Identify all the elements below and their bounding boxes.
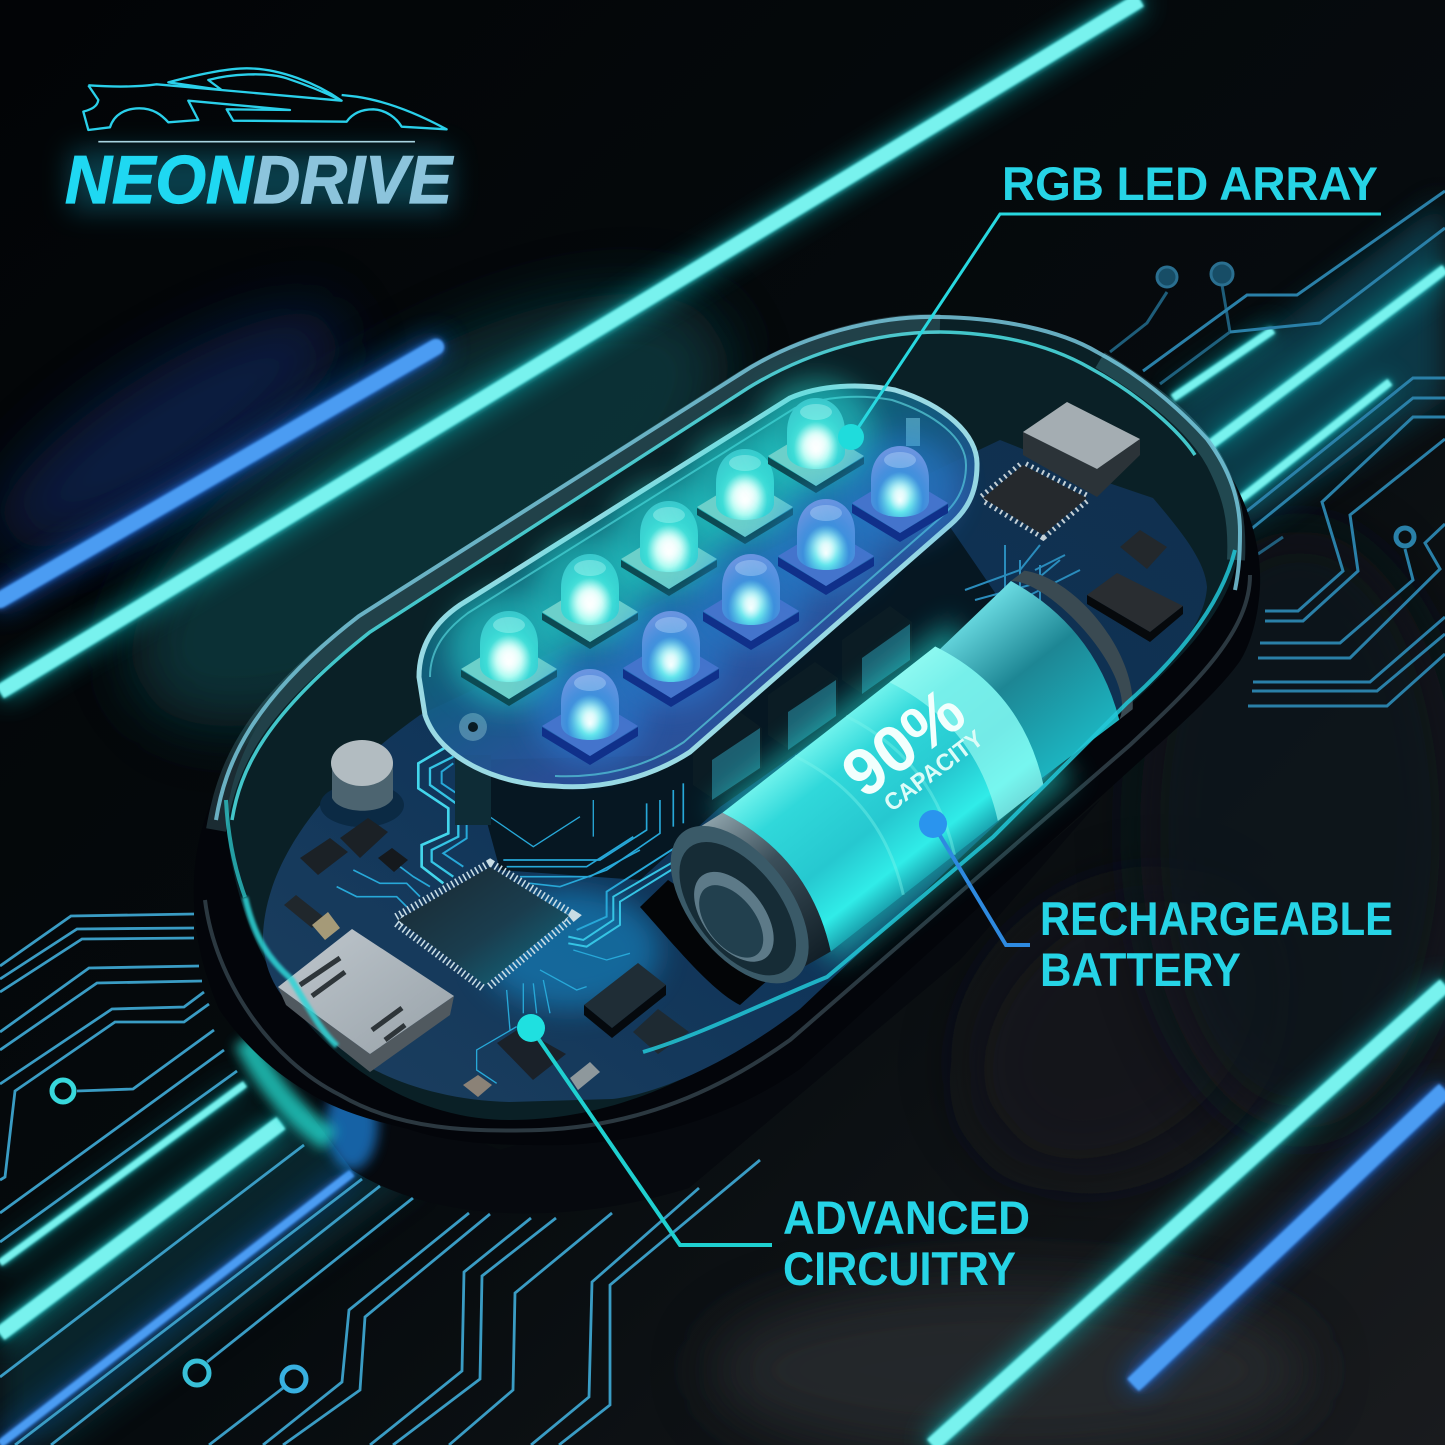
LED row: blue xyxy=(532,434,958,765)
label: ADVANCED xyxy=(783,1191,1030,1244)
LED plate xyxy=(419,379,977,787)
dot xyxy=(838,424,864,450)
circuit traces: bottom left xyxy=(0,914,760,1445)
circuit traces: right xyxy=(1110,191,1445,706)
USB connector xyxy=(278,929,454,1072)
dot xyxy=(517,1014,545,1042)
icon: car outline xyxy=(83,68,447,142)
LED row: cyan xyxy=(449,379,876,708)
board traces: centre xyxy=(337,747,683,1083)
small components xyxy=(284,818,689,1097)
circuit board xyxy=(263,402,1207,1102)
pillars below LED plate xyxy=(455,606,912,825)
mounting holes xyxy=(459,418,920,741)
label: BATTERY xyxy=(1040,943,1241,996)
battery xyxy=(642,549,1166,1019)
microcontroller chip xyxy=(398,867,569,985)
logo glow xyxy=(70,150,450,210)
logo wordmark: NEONDRIVE xyxy=(65,142,455,218)
callout: rechargeable battery xyxy=(919,810,1393,996)
dome interior xyxy=(226,317,1240,1120)
logo: NeonDrive xyxy=(65,68,455,218)
callout: RGB LED array xyxy=(838,157,1381,450)
board traces: right xyxy=(965,545,1080,620)
black base xyxy=(194,352,1260,1145)
dot xyxy=(919,810,947,838)
battery capacity text: CAPACITY xyxy=(879,725,989,817)
battery cyan body xyxy=(722,634,1060,951)
callout: advanced circuitry xyxy=(517,1014,1030,1295)
label: RECHARGEABLE xyxy=(1040,892,1393,945)
battery capacity text: 90% xyxy=(828,673,978,811)
base ribbed side xyxy=(245,800,1100,1213)
battery metal end xyxy=(644,793,847,1009)
battery cut-out xyxy=(640,880,790,1005)
battery glow xyxy=(713,621,1073,964)
right side chips xyxy=(983,402,1183,642)
battery glass end xyxy=(918,553,1155,792)
transparent dome xyxy=(216,317,1240,1052)
base rim highlight xyxy=(205,575,1250,1131)
device xyxy=(194,317,1260,1213)
leader line xyxy=(531,1028,772,1245)
leader line xyxy=(852,214,1381,437)
shadow under plate xyxy=(470,527,1000,880)
label: RGB LED ARRAY xyxy=(1002,157,1378,210)
capacitor xyxy=(320,740,404,827)
label: CIRCUITRY xyxy=(783,1242,1016,1295)
leader line xyxy=(933,824,1030,945)
